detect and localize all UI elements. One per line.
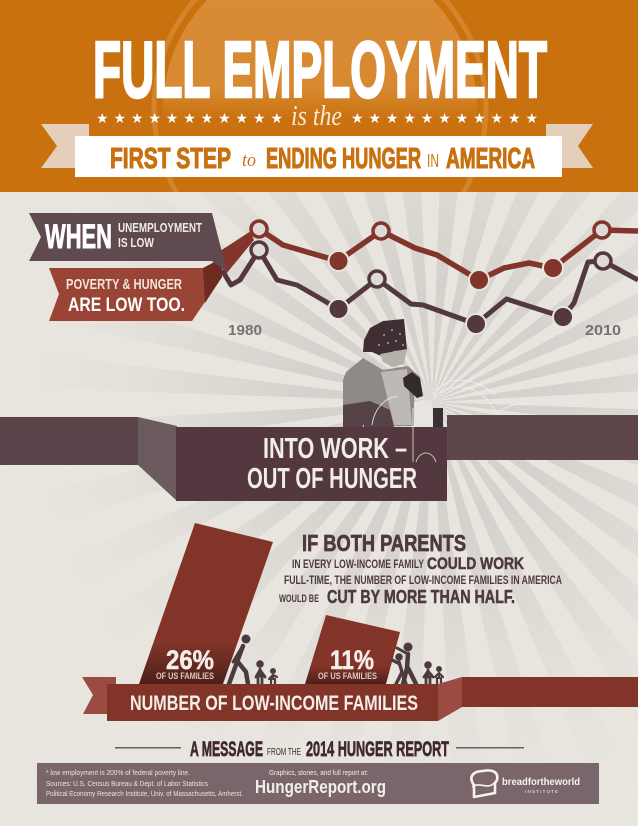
face	[380, 349, 407, 367]
work piece	[433, 408, 443, 427]
bar: 11 percent: 11%	[330, 645, 374, 675]
bar: 11 percent	[305, 615, 400, 684]
ribbon tail right	[546, 124, 593, 168]
icon: bread logo	[471, 770, 497, 797]
family group two	[392, 642, 443, 684]
illustration: welder	[343, 319, 530, 462]
footer heading: 2014 HUNGER REPORT	[306, 738, 449, 761]
line chart	[222, 221, 638, 339]
footer heading: FROM THE	[267, 747, 301, 758]
ribbon right section	[462, 677, 638, 707]
bar: 26 percent: 26%	[166, 645, 214, 675]
ribbon tail left	[41, 124, 89, 168]
stars right: ★★★★★★★★★★★	[351, 111, 538, 127]
report link: HungerReport.org	[255, 777, 386, 797]
text block: if both parents	[279, 530, 562, 607]
banner: poverty and hunger	[49, 258, 222, 321]
band: into work, out of hunger: INTO WORK –	[263, 433, 407, 465]
subtitle ribbon: AMERICA	[446, 143, 535, 175]
bar: 11 percent: OF US FAMILIES	[318, 671, 377, 681]
bright work area	[414, 400, 433, 427]
subtitle ribbon: ENDING HUNGER	[266, 143, 421, 175]
sparks	[361, 380, 530, 462]
bread for the world name: INSTITUTE	[525, 789, 558, 794]
banner: poverty and hunger: POVERTY & HUNGER	[66, 276, 182, 293]
header panel	[0, 0, 638, 192]
sources text: * low employment is 200% of federal poverty line.	[46, 770, 190, 777]
unemployment line	[222, 242, 638, 334]
banner: when unemployment is low: UNEMPLOYMENT	[118, 221, 202, 235]
footer heading: A MESSAGE	[190, 738, 263, 761]
paper texture	[0, 192, 638, 826]
ribbon: number of low-income families	[107, 684, 438, 721]
band: into work, out of hunger	[176, 427, 447, 501]
band: into work, left section	[0, 417, 138, 465]
text block: if both parents: CUT BY MORE THAN HALF.	[327, 587, 515, 607]
glove and torch	[403, 372, 423, 398]
band: right section	[447, 415, 638, 460]
poverty line	[222, 221, 638, 290]
banner: poverty and hunger: ARE LOW TOO.	[68, 295, 185, 316]
sources text: Sources: U.S. Census Bureau & Dept. of Labor Statistics	[46, 781, 208, 788]
trousers	[343, 401, 394, 427]
ribbon: number of low-income families: NUMBER OF LOW-INCOME FAMILIES	[130, 692, 418, 715]
year 1980: 1980	[228, 322, 262, 339]
band fold left	[138, 417, 177, 501]
text block: if both parents: IF BOTH PARENTS	[302, 530, 466, 556]
stars left: ★★★★★★★★★★★	[96, 111, 283, 127]
footer heading	[115, 738, 524, 761]
band: into work, out of hunger: OUT OF HUNGER	[247, 463, 417, 495]
banner: when unemployment is low: WHEN	[45, 218, 112, 256]
header circle emblem	[152, 0, 488, 192]
family group one	[229, 634, 277, 684]
is the: is the	[291, 101, 342, 132]
ribbon tail	[82, 677, 116, 714]
shirt highlight	[381, 369, 412, 425]
spark over band	[413, 427, 436, 462]
text block: if both parents: IN EVERY LOW-INCOME FAMILY	[292, 559, 424, 571]
report link	[255, 770, 386, 797]
bread for the world name	[502, 777, 580, 794]
sources text	[46, 770, 243, 798]
subtitle ribbon: to	[242, 150, 256, 171]
banner: when unemployment is low	[29, 213, 227, 272]
banner: when unemployment is low: IS LOW	[118, 236, 154, 250]
text block: if both parents: COULD WORK	[427, 554, 525, 573]
subtitle ribbon: FIRST STEP	[110, 143, 231, 175]
subtitle ribbon	[75, 136, 562, 177]
year 2010: 2010	[585, 322, 621, 339]
background sunburst rays	[168, 192, 638, 666]
footer panel	[37, 763, 599, 804]
header background	[0, 0, 638, 192]
bread for the world name: breadfortheworld	[502, 777, 580, 788]
bar: 26 percent	[139, 523, 273, 684]
head scarf	[363, 319, 407, 357]
ribbon fold	[438, 677, 462, 721]
text block: if both parents: WOULD BE	[279, 593, 319, 605]
subtitle ribbon: IN	[427, 151, 439, 171]
report link: Graphics, stories, and full report at:	[269, 770, 368, 777]
bar: 26 percent: OF US FAMILIES	[156, 671, 214, 681]
sources text: Political Economy Research Institute, Univ. of Massachusetts, Amherst.	[46, 791, 243, 798]
torso	[343, 358, 420, 426]
